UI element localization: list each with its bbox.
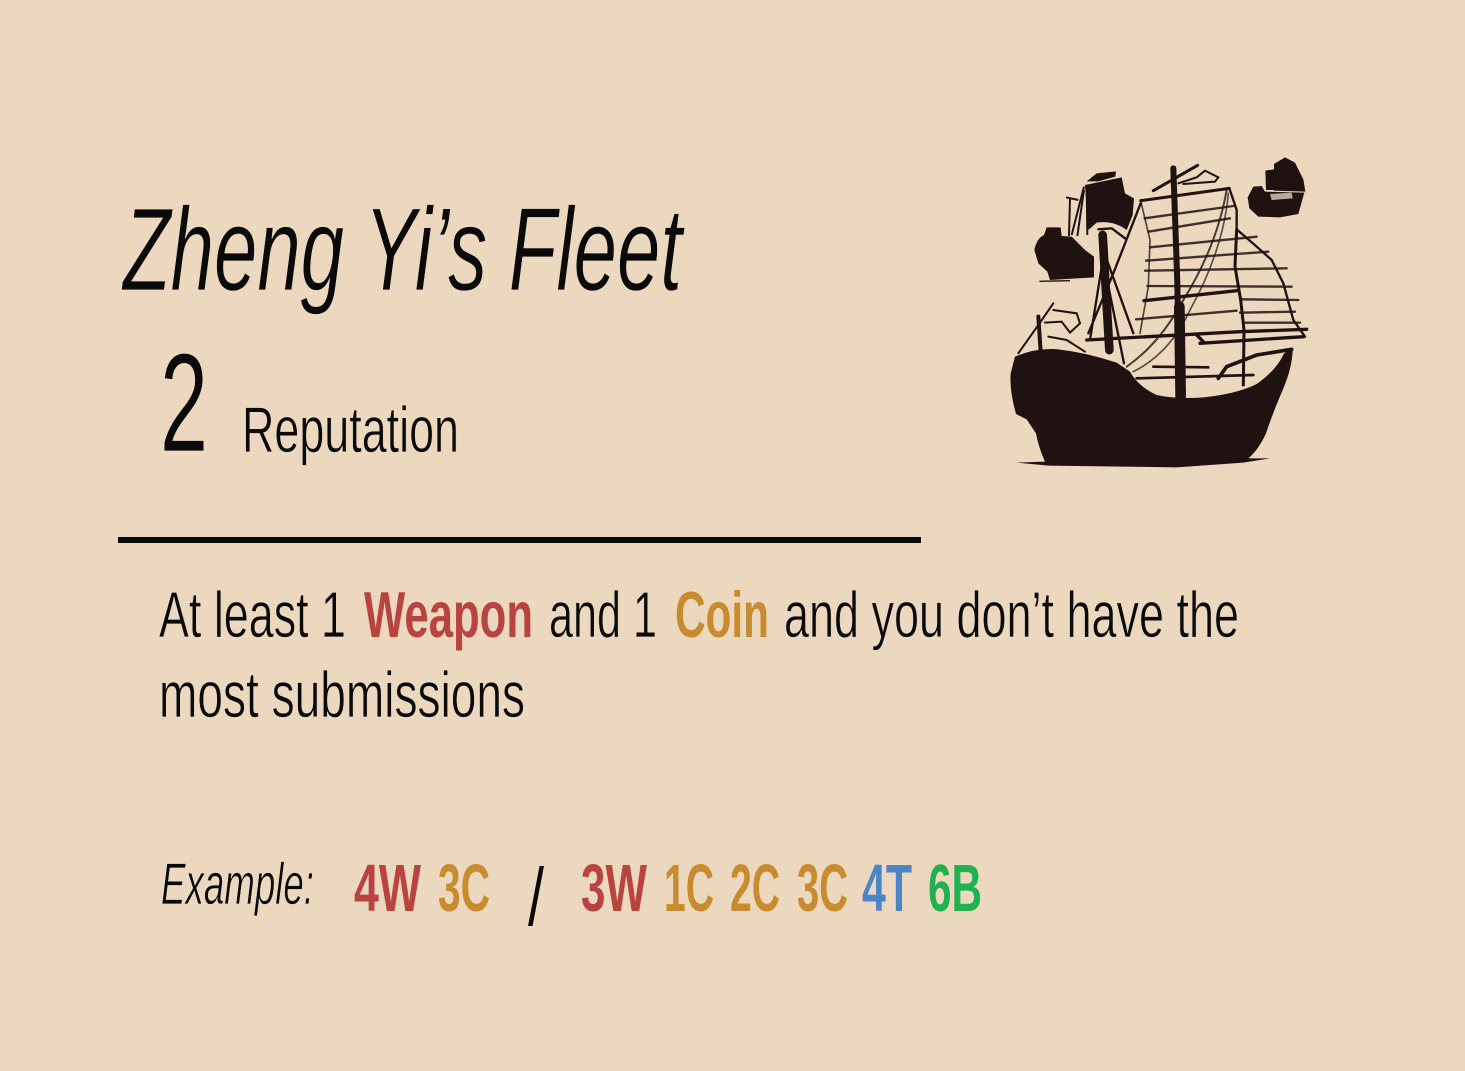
example: second resource set: 1C — [664, 851, 714, 926]
example: first resource set: 3C — [438, 851, 490, 926]
requirement text: At least 1 — [159, 578, 346, 651]
keyword: weapon: Weapon — [364, 578, 533, 651]
example: second resource set: 3W — [581, 851, 648, 926]
icon: distant ship left — [1034, 171, 1134, 281]
example label: Example: — [161, 852, 314, 917]
title: Zheng Yi’s Fleet — [121, 184, 685, 316]
requirement text: and you don’t have the — [784, 578, 1239, 651]
example separator: / — [528, 852, 544, 943]
example: first resource set: 4W — [354, 851, 422, 926]
reputation label: Reputation — [242, 393, 459, 466]
requirement text: most submissions — [159, 658, 525, 731]
requirement text — [159, 578, 1239, 731]
requirement text: and 1 — [549, 578, 657, 651]
keyword: coin: Coin — [675, 578, 769, 651]
icon: distant ship right — [1248, 157, 1305, 217]
example: second resource set: 2C — [730, 851, 780, 926]
example: second resource set: 6B — [928, 851, 982, 926]
icon: main ship rigging — [1018, 165, 1307, 397]
icon: main ship hull — [1010, 348, 1293, 467]
example: second resource set: 3C — [797, 851, 848, 926]
example: second resource set: 4T — [862, 851, 912, 926]
icon: junk ship fleet — [1010, 157, 1307, 467]
reputation value: 2 — [160, 324, 208, 481]
example: second resource set — [581, 851, 982, 926]
divider rule — [118, 537, 921, 543]
